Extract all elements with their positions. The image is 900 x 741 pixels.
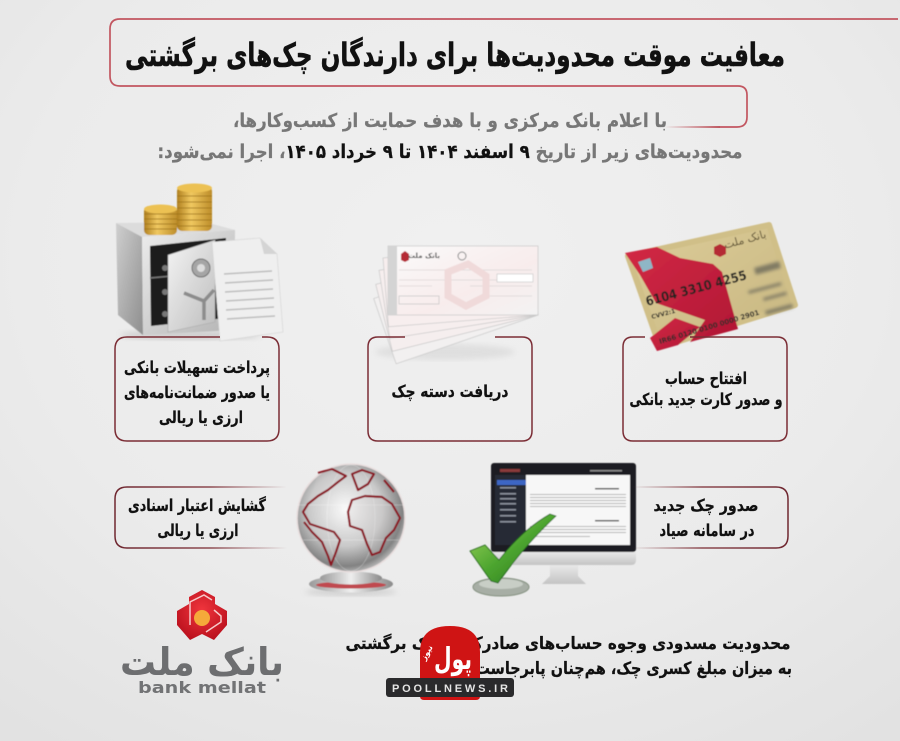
icon: bank card: 6104 3310 4255 xyxy=(644,268,748,310)
icon: bank card xyxy=(625,225,795,351)
icon: bank card: CVV2:1 xyxy=(651,308,676,321)
panel: bank facilities: یا صدور ضمانت‌نامه‌های xyxy=(124,383,270,403)
intro text: محدودیت‌های زیر از تاریخ ۹ اسفند ۱۴۰۴ تا ۹ خرداد ۱۴۰۵، اجرا نمی‌شود: xyxy=(158,141,742,163)
icon: safe with coins and document xyxy=(116,184,283,341)
icon: monitor with check mark xyxy=(470,463,636,596)
panel: account and card: و صدور کارت جدید بانکی xyxy=(630,390,782,410)
panel: cheque book xyxy=(368,337,532,441)
panel: bank facilities xyxy=(115,337,279,441)
title frame xyxy=(110,19,898,127)
footer note: محدودیت مسدودی وجوه حساب‌های صادرکننده چک برگشتی xyxy=(346,633,790,654)
icon: globe xyxy=(297,464,405,596)
footer note: به میزان مبلغ کسری چک، هم‌چنان پابرجاست. xyxy=(470,659,792,679)
intro text xyxy=(158,110,742,163)
icon: bank card: IR66 0120 0100 0000 2901 xyxy=(658,309,760,346)
panel: sayad cheque: صدور چک جدید xyxy=(654,496,758,516)
panel: letter of credit xyxy=(115,487,287,548)
panel: letter of credit: ارزی یا ریالی xyxy=(158,521,238,540)
panel: bank facilities: ارزی یا ریالی xyxy=(159,408,243,427)
watermark: poolnews: پول xyxy=(434,642,472,677)
panel: sayad cheque: در سامانه صیاد xyxy=(660,521,754,540)
intro text: با اعلام بانک مرکزی و با هدف حمایت از کسب‌وکارها، xyxy=(233,110,667,132)
logo: bank mellat: بانک ملت xyxy=(120,640,284,684)
coins xyxy=(144,184,212,235)
icon: bank card: بانک ملت xyxy=(723,228,768,251)
logo: bank mellat: bank mellat xyxy=(138,678,266,697)
panel: letter of credit: گشایش اعتبار اسنادی xyxy=(128,495,266,515)
watermark: poolnews: POOLLNEWS.IR xyxy=(392,683,508,695)
panel: cheque book: دریافت دسته چک xyxy=(392,382,508,402)
panel: account and card: افتتاح حساب xyxy=(665,369,747,388)
panel: account and card xyxy=(623,337,787,441)
panel: bank facilities: پرداخت تسهیلات بانکی xyxy=(124,358,270,378)
footer note xyxy=(346,633,792,679)
logo: bank mellat xyxy=(120,590,284,697)
panel: sayad cheque xyxy=(632,487,788,548)
icon: cheque book fan xyxy=(374,246,538,364)
icon: cheque book fan: بانک ملت xyxy=(408,252,440,260)
watermark: poolnews: نیوز xyxy=(418,644,435,663)
watermark: poolnews xyxy=(386,626,514,700)
